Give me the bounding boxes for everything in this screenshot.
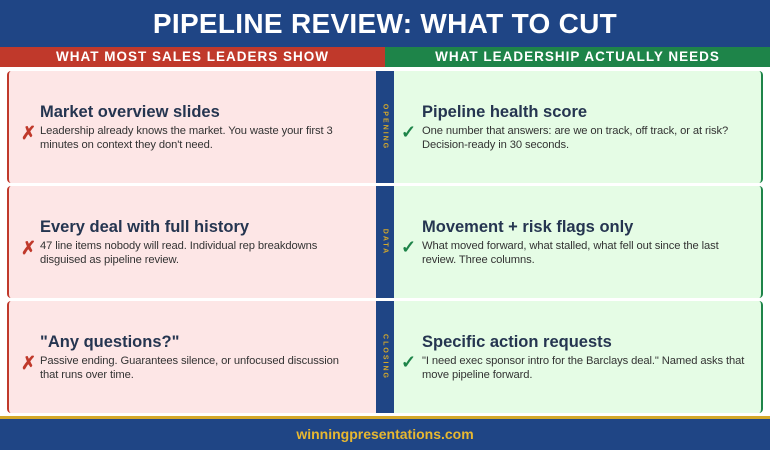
footer [0, 416, 770, 450]
title: PIPELINE REVIEW: WHAT TO CUT [153, 8, 617, 39]
row: closing: Specific action requests [422, 333, 612, 351]
row: closing [7, 301, 763, 413]
column header: left: WHAT MOST SALES LEADERS SHOW [56, 49, 329, 64]
row: opening: Leadership already knows the market. You waste your first 3 minutes on context they don't need. [40, 125, 333, 151]
row: data [7, 186, 763, 298]
column header: right [385, 47, 770, 67]
row: data: What moved forward, what stalled, what fell out since the last review. Three columns. [422, 240, 719, 266]
row: closing: "I need exec sponsor intro for the Barclays deal." Named asks that move pipeline forward. [422, 355, 744, 381]
row: opening [7, 71, 763, 183]
title [0, 0, 770, 47]
row: data: Movement + risk flags only [422, 218, 633, 236]
row: opening: One number that answers: are we on track, off track, or at risk? Decision-ready in 30 seconds. [422, 125, 728, 151]
row: closing: Passive ending. Guarantees silence, or unfocused discussion that runs over time. [40, 355, 339, 381]
row: data: DATA [382, 229, 388, 255]
row: opening: Market overview slides [40, 103, 220, 121]
row: data: ✗ [21, 238, 36, 258]
row: opening: Pipeline health score [422, 103, 587, 121]
column header: left [0, 47, 385, 67]
row: data: Every deal with full history [40, 218, 249, 236]
row: closing: ✗ [21, 353, 36, 373]
row: closing: CLOSING [382, 334, 388, 380]
column header: right: WHAT LEADERSHIP ACTUALLY NEEDS [435, 49, 720, 64]
row: closing: "Any questions?" [40, 333, 179, 351]
row: data: ✓ [401, 237, 416, 257]
row: data: 47 line items nobody will read. Individual rep breakdowns disguised as pipeline review. [40, 240, 317, 266]
footer: winningpresentations.com [296, 426, 474, 442]
row: closing: ✓ [401, 352, 416, 372]
row: opening: OPENING [382, 104, 388, 150]
row: opening: ✓ [401, 122, 416, 142]
row: opening: ✗ [21, 123, 36, 143]
